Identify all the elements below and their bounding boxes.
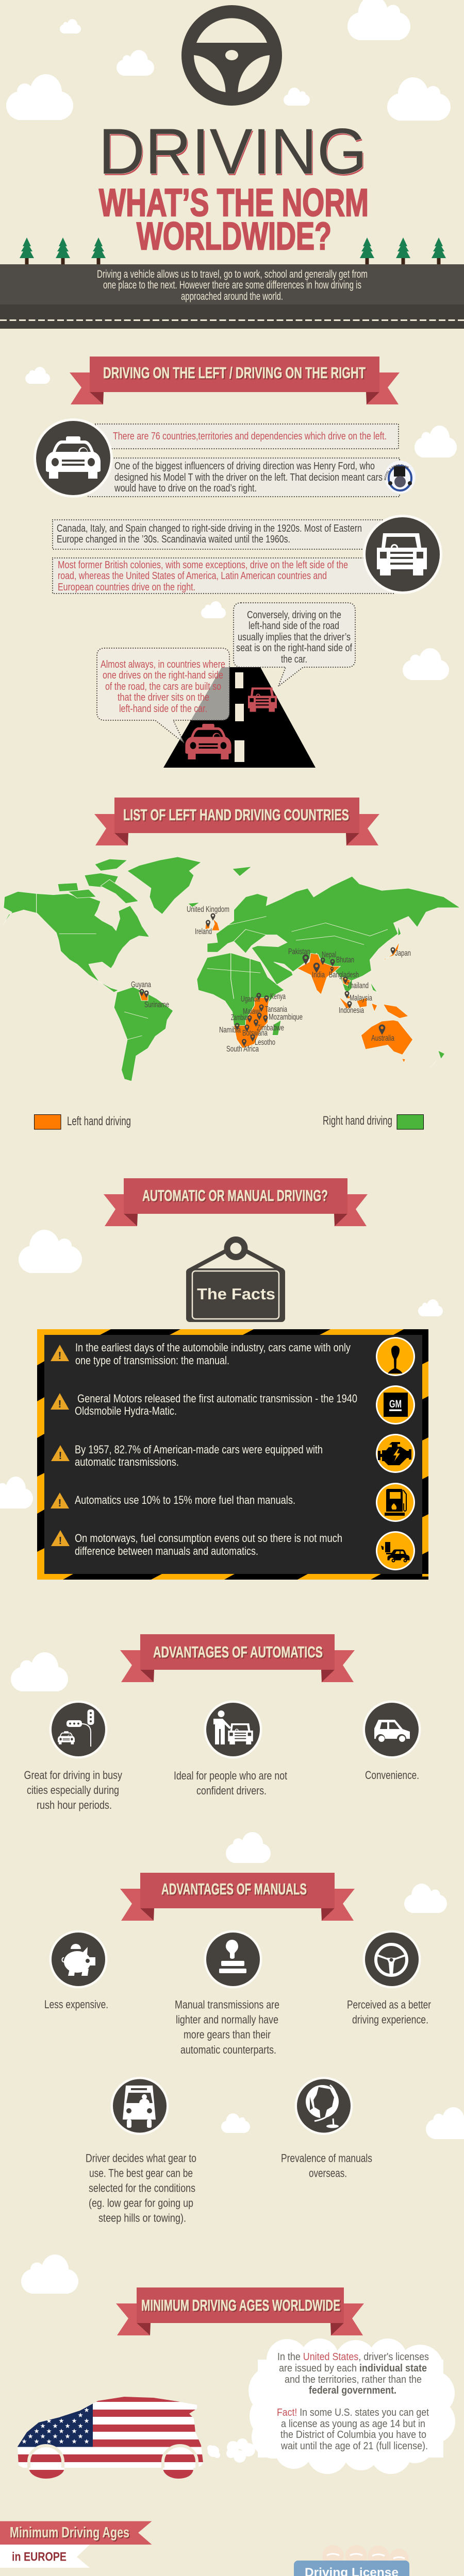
map country labels: Suriname (144, 1001, 169, 1009)
cloud (403, 648, 449, 680)
legend: left hand driving: Left hand driving (67, 1114, 131, 1128)
cloud (415, 426, 457, 457)
ribbon heading: automatic or manual (104, 1178, 368, 1226)
fact 1: In the earliest days of the automobile industry, cars came with only (75, 1341, 351, 1354)
icon: red truck on road (248, 687, 277, 712)
fact 3 (51, 1443, 323, 1468)
speech bubble: right-hand side: the car. (281, 654, 307, 665)
map country labels: Namibia (219, 1026, 241, 1035)
title: DRIVING: DRIVING (100, 117, 368, 189)
legend: left hand driving (34, 1114, 131, 1129)
subtitle: WHAT’S THE NORM (99, 181, 369, 224)
cloud (226, 1832, 271, 1863)
map country labels: Japan (395, 949, 411, 958)
fact 5: difference between manuals and automatics. (75, 1545, 258, 1557)
text: driver decides gear: steep hills or towing). (98, 2212, 186, 2225)
icon: GM logo (376, 1385, 415, 1425)
cloud (347, 0, 410, 40)
intro text: approached around the world. (181, 291, 283, 302)
fact 4: ! (58, 1498, 61, 1509)
text: busy cities: cities especially during (27, 1784, 119, 1797)
thought cloud: US licences: federal government. (309, 2385, 396, 2396)
fact 1: ! (58, 1350, 61, 1362)
box: Henry Ford: would have to drive on the road’s right. (114, 483, 257, 494)
icon: gear knob (204, 1930, 262, 1989)
text: lighter and more gears: more gears than their (184, 2028, 271, 2041)
map country labels: Bhutan (336, 956, 354, 964)
icon: globe (295, 2077, 353, 2135)
map country labels: South Africa (226, 1045, 259, 1054)
text: lighter and more gears: Manual transmissions are (175, 1998, 279, 2011)
map country labels: Malaysia (350, 994, 372, 1003)
intro band (0, 264, 464, 304)
map country labels: Botswana (242, 1029, 268, 1038)
thought puffs (207, 2438, 255, 2463)
cloud (60, 19, 81, 33)
icon: fuel pump (376, 1483, 415, 1522)
text: driver decides gear (86, 2151, 196, 2225)
icon: truck in circle (363, 515, 442, 594)
icon: taxi in circle (34, 418, 113, 498)
thought cloud: US licences: are issued by each individual state (279, 2363, 427, 2374)
icon: steering wheel (363, 1930, 421, 1989)
icon: Model T Ford Club logo: MODEL T FORD CLUB (384, 464, 409, 480)
speech bubble: left-hand side: one drives on the right-hand side (103, 670, 223, 681)
icon: Model T Ford Club logo (384, 461, 416, 494)
road (0, 304, 464, 329)
thought cloud: US licences: a license as young as age 14 but in (281, 2418, 425, 2430)
fact 1 (51, 1341, 351, 1367)
thought cloud: US licences: the District of Columbia you have to (280, 2429, 426, 2441)
icon: piggy bank (49, 1930, 107, 1989)
ribbon heading: list of left hand driving countries: LIST OF LEFT HAND DRIVING COUNTRIES (123, 806, 349, 824)
ribbon heading: minimum driving ages worldwide (116, 2287, 364, 2335)
map country labels: Uganda (241, 995, 260, 1004)
illustration: hand holding driving license (294, 2545, 409, 2576)
fact 5: On motorways, fuel consumption evens out so there is not much (75, 1532, 342, 1545)
cloud (284, 88, 310, 106)
title: DRIVING: DRIVING (98, 116, 367, 188)
cloud (221, 2113, 250, 2133)
thought cloud: US licences: Fact! In some U.S. states you can get (277, 2407, 429, 2418)
text: prevalence overseas: overseas. (309, 2167, 347, 2179)
cloud (21, 2255, 78, 2294)
map country labels: Malawi (243, 1007, 260, 1016)
map country labels: Indonesia (339, 1006, 364, 1015)
speech bubble: right-hand side: seat is on the right-hand side of (236, 642, 352, 654)
text: driver decides gear: Driver decides what gear to (86, 2151, 196, 2165)
text: not confident drivers: Ideal for people who are not (174, 1769, 287, 1782)
cloud (418, 1299, 443, 1316)
text: prevalence overseas: Prevalence of manuals (281, 2151, 372, 2165)
cloud (117, 50, 154, 76)
speech bubble: left-hand side: Almost always, in countries where (101, 659, 225, 670)
map country labels: Mozambique (269, 1013, 303, 1022)
text: less expensive: Less expensive. (44, 1998, 108, 2011)
world map (3, 857, 460, 1081)
fact 3: ! (59, 1450, 62, 1462)
panel: the facts hazard board (37, 1329, 428, 1580)
map country labels: Bangladesh (329, 971, 359, 979)
text: better experience (347, 1998, 431, 2026)
intro text: one place to the next. However there are some differences in how driving is (103, 279, 361, 291)
text: lighter and more gears (175, 1998, 279, 2056)
cloud (0, 1477, 33, 1509)
text: better experience: Perceived as a better (347, 1998, 431, 2011)
ribbon heading: list of left hand driving countries (94, 798, 379, 845)
speech bubble: right-hand side: Conversely, driving on the (247, 609, 341, 621)
fact 3: automatic transmissions. (75, 1455, 179, 1468)
fact 5: ! (59, 1535, 62, 1547)
thought cloud: US licences: and the territories, rather than the (285, 2374, 422, 2385)
speech bubble: right-hand side: usually implies that the driver’s (238, 632, 351, 643)
text: driver decides gear: selected for the conditions (89, 2182, 195, 2195)
thought cloud: US licences: In the United States, driver's licenses (277, 2351, 429, 2363)
cloud (11, 1652, 68, 1691)
cloud (201, 601, 226, 618)
box: Canada Italy Spain: Canada, Italy, and Spain changed to right-side driving in the 1920s. Most of Eastern (57, 523, 362, 534)
intro text (97, 268, 368, 302)
ribbon heading: minimum driving ages worldwide: MINIMUM DRIVING AGES WORLDWIDE (141, 2296, 340, 2314)
icon: GM logo: GM (389, 1398, 402, 1410)
cloud (19, 1230, 82, 1273)
ribbon heading: advantages of automatics (120, 1634, 355, 1682)
map country labels: Pakistan (288, 947, 310, 956)
text: not confident drivers: confident drivers. (196, 1784, 267, 1797)
cloud (387, 77, 451, 121)
map country labels: United Kingdom (187, 905, 229, 914)
map country labels: Zimbabwe (257, 1024, 284, 1032)
fact 2: General Motors released the first automatic transmission - the 1940 (77, 1392, 357, 1405)
text: driver decides gear: use. The best gear can be (89, 2167, 193, 2179)
map country labels: Tansania (265, 1005, 287, 1014)
text: prevalence overseas (281, 2151, 372, 2179)
speech bubble: right-hand side: left-hand side of the road (248, 620, 339, 632)
map pins (139, 913, 395, 1046)
icon: car with pump (376, 1531, 415, 1570)
speech bubble: right-hand side (234, 603, 355, 686)
box: Henry Ford (88, 458, 400, 497)
sign: The Facts (186, 1240, 285, 1322)
icon: gear stick (376, 1337, 415, 1376)
sign: The Facts: The Facts (197, 1285, 275, 1303)
speech bubble: left-hand side (97, 648, 229, 743)
text: better experience: driving experience. (352, 2013, 428, 2026)
road illustration (163, 667, 316, 768)
subtitle (99, 181, 369, 258)
icon: person and car (204, 1700, 262, 1759)
text: busy cities (24, 1769, 122, 1811)
legend: right hand driving: Right hand driving (323, 1114, 392, 1128)
fact 4: Automatics use 10% to 15% more fuel than manuals. (75, 1494, 295, 1506)
box: Henry Ford: One of the biggest influencers of driving direction was Henry Ford, who (114, 461, 375, 472)
ribbon: minimum driving ages in Europe: in EUROPE (12, 2550, 67, 2564)
icon: engine (376, 1434, 415, 1473)
map country labels: India (312, 971, 325, 979)
speech bubble: left-hand side: that the driver sits on the (118, 692, 209, 703)
box: former British colonies: Most former British colonies, with some exceptions, drive on the left side of the (58, 560, 348, 571)
trees left (20, 238, 106, 264)
cloud (6, 74, 73, 120)
icon: red taxi on road (185, 724, 231, 759)
thought cloud: US licences (248, 2338, 455, 2474)
map country labels: Kenya (270, 992, 286, 1001)
intro text: Driving a vehicle allows us to travel, go to work, school and generally get from (97, 268, 368, 280)
ribbon: minimum driving ages in Europe (0, 2521, 152, 2568)
trees right (360, 238, 446, 264)
thought cloud: US licences: wait until the age of 21 (full license). (280, 2441, 428, 2452)
map country labels: Zambia (231, 1013, 247, 1022)
fact 4 (51, 1493, 295, 1509)
box: Canada Italy Spain: Europe changed in the ’30s. Scandinavia waited until the 1960s. (57, 534, 290, 545)
text: busy cities: rush hour periods. (37, 1799, 112, 1811)
map country labels (131, 905, 411, 1054)
cloud (25, 367, 50, 384)
box: former British colonies: European countries drive on the right. (58, 582, 195, 593)
map country labels: Ireland (195, 927, 212, 936)
ribbon heading: automatic or manual: AUTOMATIC OR MANUAL DRIVING? (142, 1187, 328, 1205)
text: not confident drivers (174, 1769, 287, 1797)
ribbon heading: driving on the left / right (70, 357, 400, 404)
fact 2 (51, 1392, 357, 1417)
text: driver decides gear: (eg. low gear for going up (89, 2197, 193, 2210)
box: 76 countries (95, 424, 399, 449)
fact 2: Oldsmobile Hydra-Matic. (75, 1404, 177, 1417)
illustration: car with US flag (15, 2393, 206, 2481)
text: lighter and more gears: automatic counterparts. (180, 2043, 276, 2056)
box: Henry Ford: designed his Model T with the driver on the left. That decision meant cars (114, 472, 383, 483)
ribbon heading: advantages of manuals: ADVANTAGES OF MANUALS (161, 1880, 307, 1898)
box: former British colonies: road, whereas the United States of America, Latin American countries and (58, 570, 327, 582)
fact 5 (51, 1530, 342, 1557)
map country labels: Lesotho (255, 1038, 275, 1047)
cloud (404, 1884, 447, 1913)
icon: steering wheel (181, 5, 282, 106)
icon: side view car (363, 1700, 421, 1759)
cloud (426, 2107, 464, 2139)
map country labels: Thailand (347, 981, 369, 990)
text: lighter and more gears: lighter and normally have (176, 2013, 278, 2026)
box: 76 countries: There are 76 countries,territories and dependencies which drive on the left. (113, 431, 387, 442)
box: former British colonies (53, 558, 395, 594)
text: convenience: Convenience. (365, 1769, 419, 1782)
ribbon heading: advantages of manuals (120, 1873, 355, 1921)
text: busy cities: Great for driving in busy (24, 1769, 122, 1782)
speech bubble: left-hand side: left-hand side of the car. (119, 703, 207, 715)
map country labels: Nepal (322, 951, 336, 959)
fact 3: By 1957, 82.7% of American-made cars were equipped with (75, 1443, 323, 1456)
subtitle: WORLDWIDE? (137, 214, 332, 258)
box: Canada Italy Spain (53, 520, 385, 549)
ribbon heading: advantages of automatics: ADVANTAGES OF AUTOMATICS (153, 1643, 323, 1661)
map country labels: Australia (371, 1034, 394, 1043)
icon: bus with driver (110, 2077, 169, 2135)
icon: traffic light and car (49, 1700, 107, 1759)
speech bubble: left-hand side: of the road, the cars are built so (105, 681, 221, 692)
fact 2: ! (58, 1399, 61, 1410)
fact 1: one type of transmission: the manual. (75, 1354, 229, 1367)
ribbon: minimum driving ages in Europe: Minimum Driving Ages (10, 2524, 129, 2541)
map country labels: Guyana (131, 980, 151, 989)
